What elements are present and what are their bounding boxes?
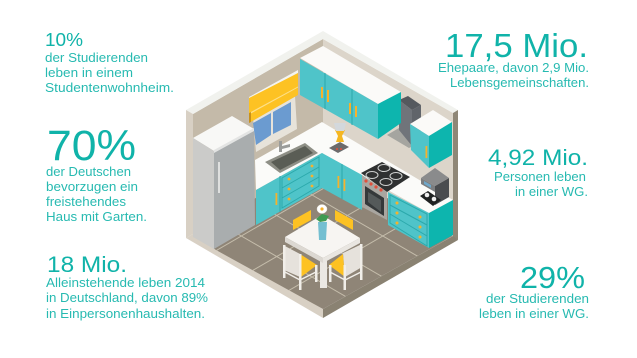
stat: 70 percent [46,122,147,224]
stat: 18 Mio: 18 Mio. [47,252,127,277]
stat: 17,5 Mio: Ehepaare, davon 2,9 Mio. [438,61,589,75]
base cabinets and counter [255,122,453,248]
stat: 70 percent: freistehendes [46,195,126,209]
stat: 4,92 Mio: Personen leben [494,170,586,184]
stat: 18 Mio: Alleinstehende leben 2014 [46,276,205,290]
stat: 18 Mio [46,252,208,321]
kitchen illustration [186,31,470,318]
front left chair [283,245,318,290]
drawers right [390,195,427,246]
window with yellow blind [249,70,298,152]
stat: 29 percent: der Studierenden [486,292,589,306]
stat: 70 percent: bevorzugen ein [46,180,138,194]
range hood [387,96,421,148]
coffee machine [420,168,449,206]
blender [329,123,349,153]
stat: 4,92 Mio: 4,92 Mio. [488,145,588,170]
floor with tiles [186,188,458,318]
stat: 70 percent: der Deutschen [46,165,131,179]
stat: 10 percent: 10% [45,29,83,50]
stat: 17,5 Mio [438,28,589,90]
stat: 10 percent: Studentenwohnheim. [45,81,174,95]
stat: 29 percent: 29% [520,260,585,295]
sink and faucet [265,141,318,173]
stat: 4,92 Mio: in einer WG. [515,185,588,199]
stat: 10 percent: der Studierenden [45,51,148,65]
upper cabinets [300,46,401,139]
infographic canvas [46,31,588,320]
oven and cooktop [361,162,410,220]
stat: 29 percent: leben in einer WG. [479,307,589,321]
dining table with vase [285,204,360,288]
room walls [186,31,458,240]
cabinet drawers left [282,157,319,208]
small wall cabinet [410,110,452,168]
fridge [193,116,255,249]
stat: 18 Mio: in Deutschland, davon 89% [46,291,208,305]
stat: 17,5 Mio: 17,5 Mio. [445,28,588,65]
stat: 4,92 Mio [488,145,588,199]
stat: 10 percent [45,29,174,95]
back chairs [293,210,353,230]
stat: 70 percent: Haus mit Garten. [46,210,147,224]
stat: 29 percent [479,260,589,321]
stat: 10 percent: leben in einem [45,66,133,80]
stat: 17,5 Mio: Lebensgemeinschaften. [450,76,589,90]
vase and flower [316,204,329,240]
cabinet handles [276,165,422,238]
stat: 70 percent: 70% [47,122,136,170]
stat: 18 Mio: in Einpersonenhaushalten. [46,307,205,321]
front right chair [329,244,362,290]
